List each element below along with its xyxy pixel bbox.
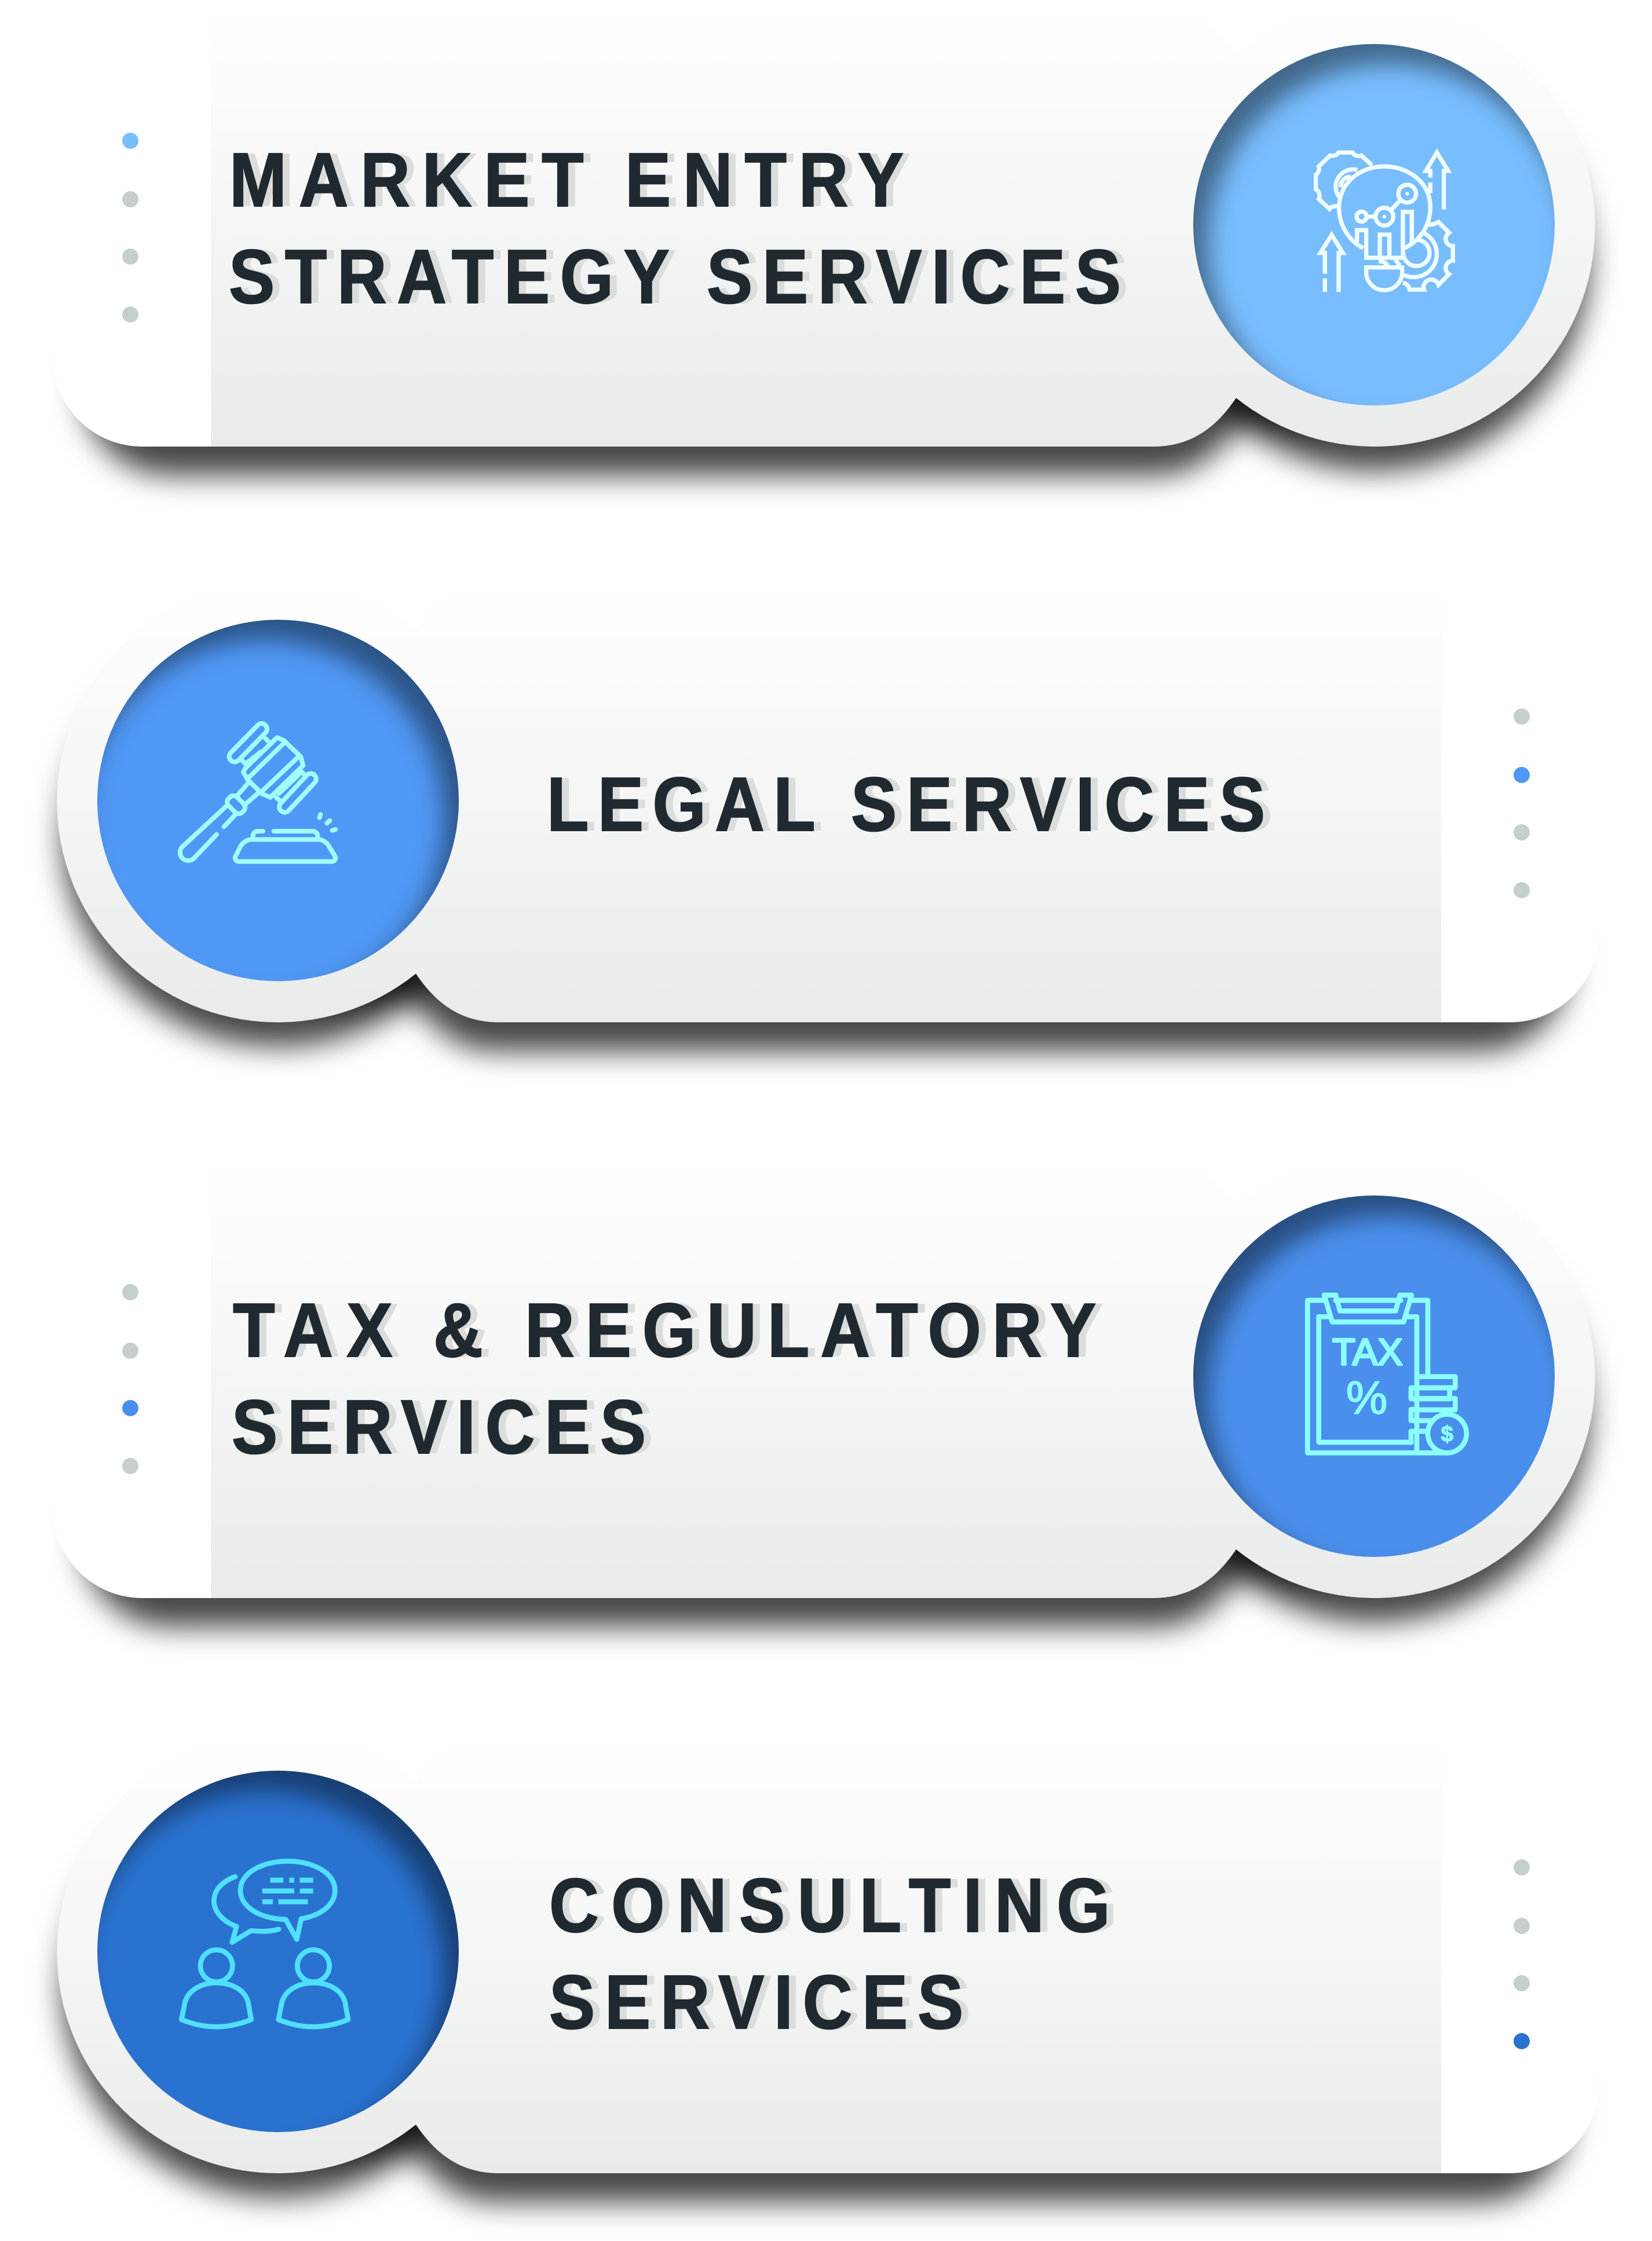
- icon disc: [1193, 1196, 1555, 1557]
- icon disc: [1193, 44, 1555, 405]
- heading: market entry strategy services: [229, 137, 1131, 319]
- heading: consulting services: SERVICES: [549, 1959, 973, 2045]
- icon: two people talking: [181, 1861, 348, 2027]
- heading: market entry strategy services: ENTRY: [625, 137, 916, 222]
- icon disc: [0, 1669, 579, 2241]
- icon: tax clipboard with coins: [1307, 1295, 1467, 1453]
- icon: tax clipboard with coins: %: [1346, 1372, 1387, 1424]
- white side tab: [53, 6, 211, 447]
- progress dots: [1514, 708, 1530, 898]
- panel: legal services: [40, 620, 1593, 1074]
- heading: legal services: LEGAL: [547, 762, 824, 847]
- heading: market entry strategy services: SERVICES: [707, 234, 1131, 319]
- card shadow: [81, 1190, 1590, 1627]
- card body: [53, 1157, 1595, 1598]
- heading: tax and regulatory services: &: [433, 1288, 483, 1373]
- progress dots: [122, 133, 138, 323]
- heading: consulting services: CONSULTING: [549, 1863, 1123, 1948]
- card body: [57, 581, 1599, 1022]
- panel: market entry strategy services: [59, 44, 1612, 499]
- progress dots: [122, 1284, 138, 1474]
- icon: gavel: [180, 721, 335, 861]
- icon: head with chart and gears: [1316, 152, 1453, 292]
- heading: market entry strategy services: STRATEGY: [229, 234, 679, 319]
- card body: [53, 5, 1595, 447]
- heading: tax and regulatory services: SERVICES: [232, 1384, 656, 1469]
- card body: [57, 1732, 1599, 2173]
- white side tab: [53, 1157, 211, 1598]
- card shadow: [81, 39, 1590, 476]
- heading: legal services: SERVICES: [851, 762, 1275, 847]
- heading: legal services: [547, 762, 1275, 847]
- white side tab: [1441, 582, 1599, 1022]
- panel: consulting services: [40, 1771, 1593, 2225]
- icon: tax clipboard with coins: TAX: [1332, 1331, 1403, 1373]
- progress dots: [1514, 1859, 1530, 2049]
- heading: market entry strategy services: MARKET: [229, 137, 595, 222]
- icon disc: [97, 620, 459, 981]
- icon: tax clipboard with coins: $: [1441, 1421, 1453, 1446]
- heading: tax and regulatory services: TAX: [233, 1288, 406, 1373]
- white side tab: [1441, 1732, 1599, 2173]
- panel: tax and regulatory services: [59, 1196, 1612, 1650]
- card shadow: [62, 615, 1571, 1051]
- card shadow: [62, 1765, 1571, 2202]
- heading: tax and regulatory services: REGULATORY: [525, 1288, 1107, 1373]
- heading: consulting services: [549, 1863, 1123, 2045]
- heading: tax and regulatory services: [232, 1288, 1107, 1469]
